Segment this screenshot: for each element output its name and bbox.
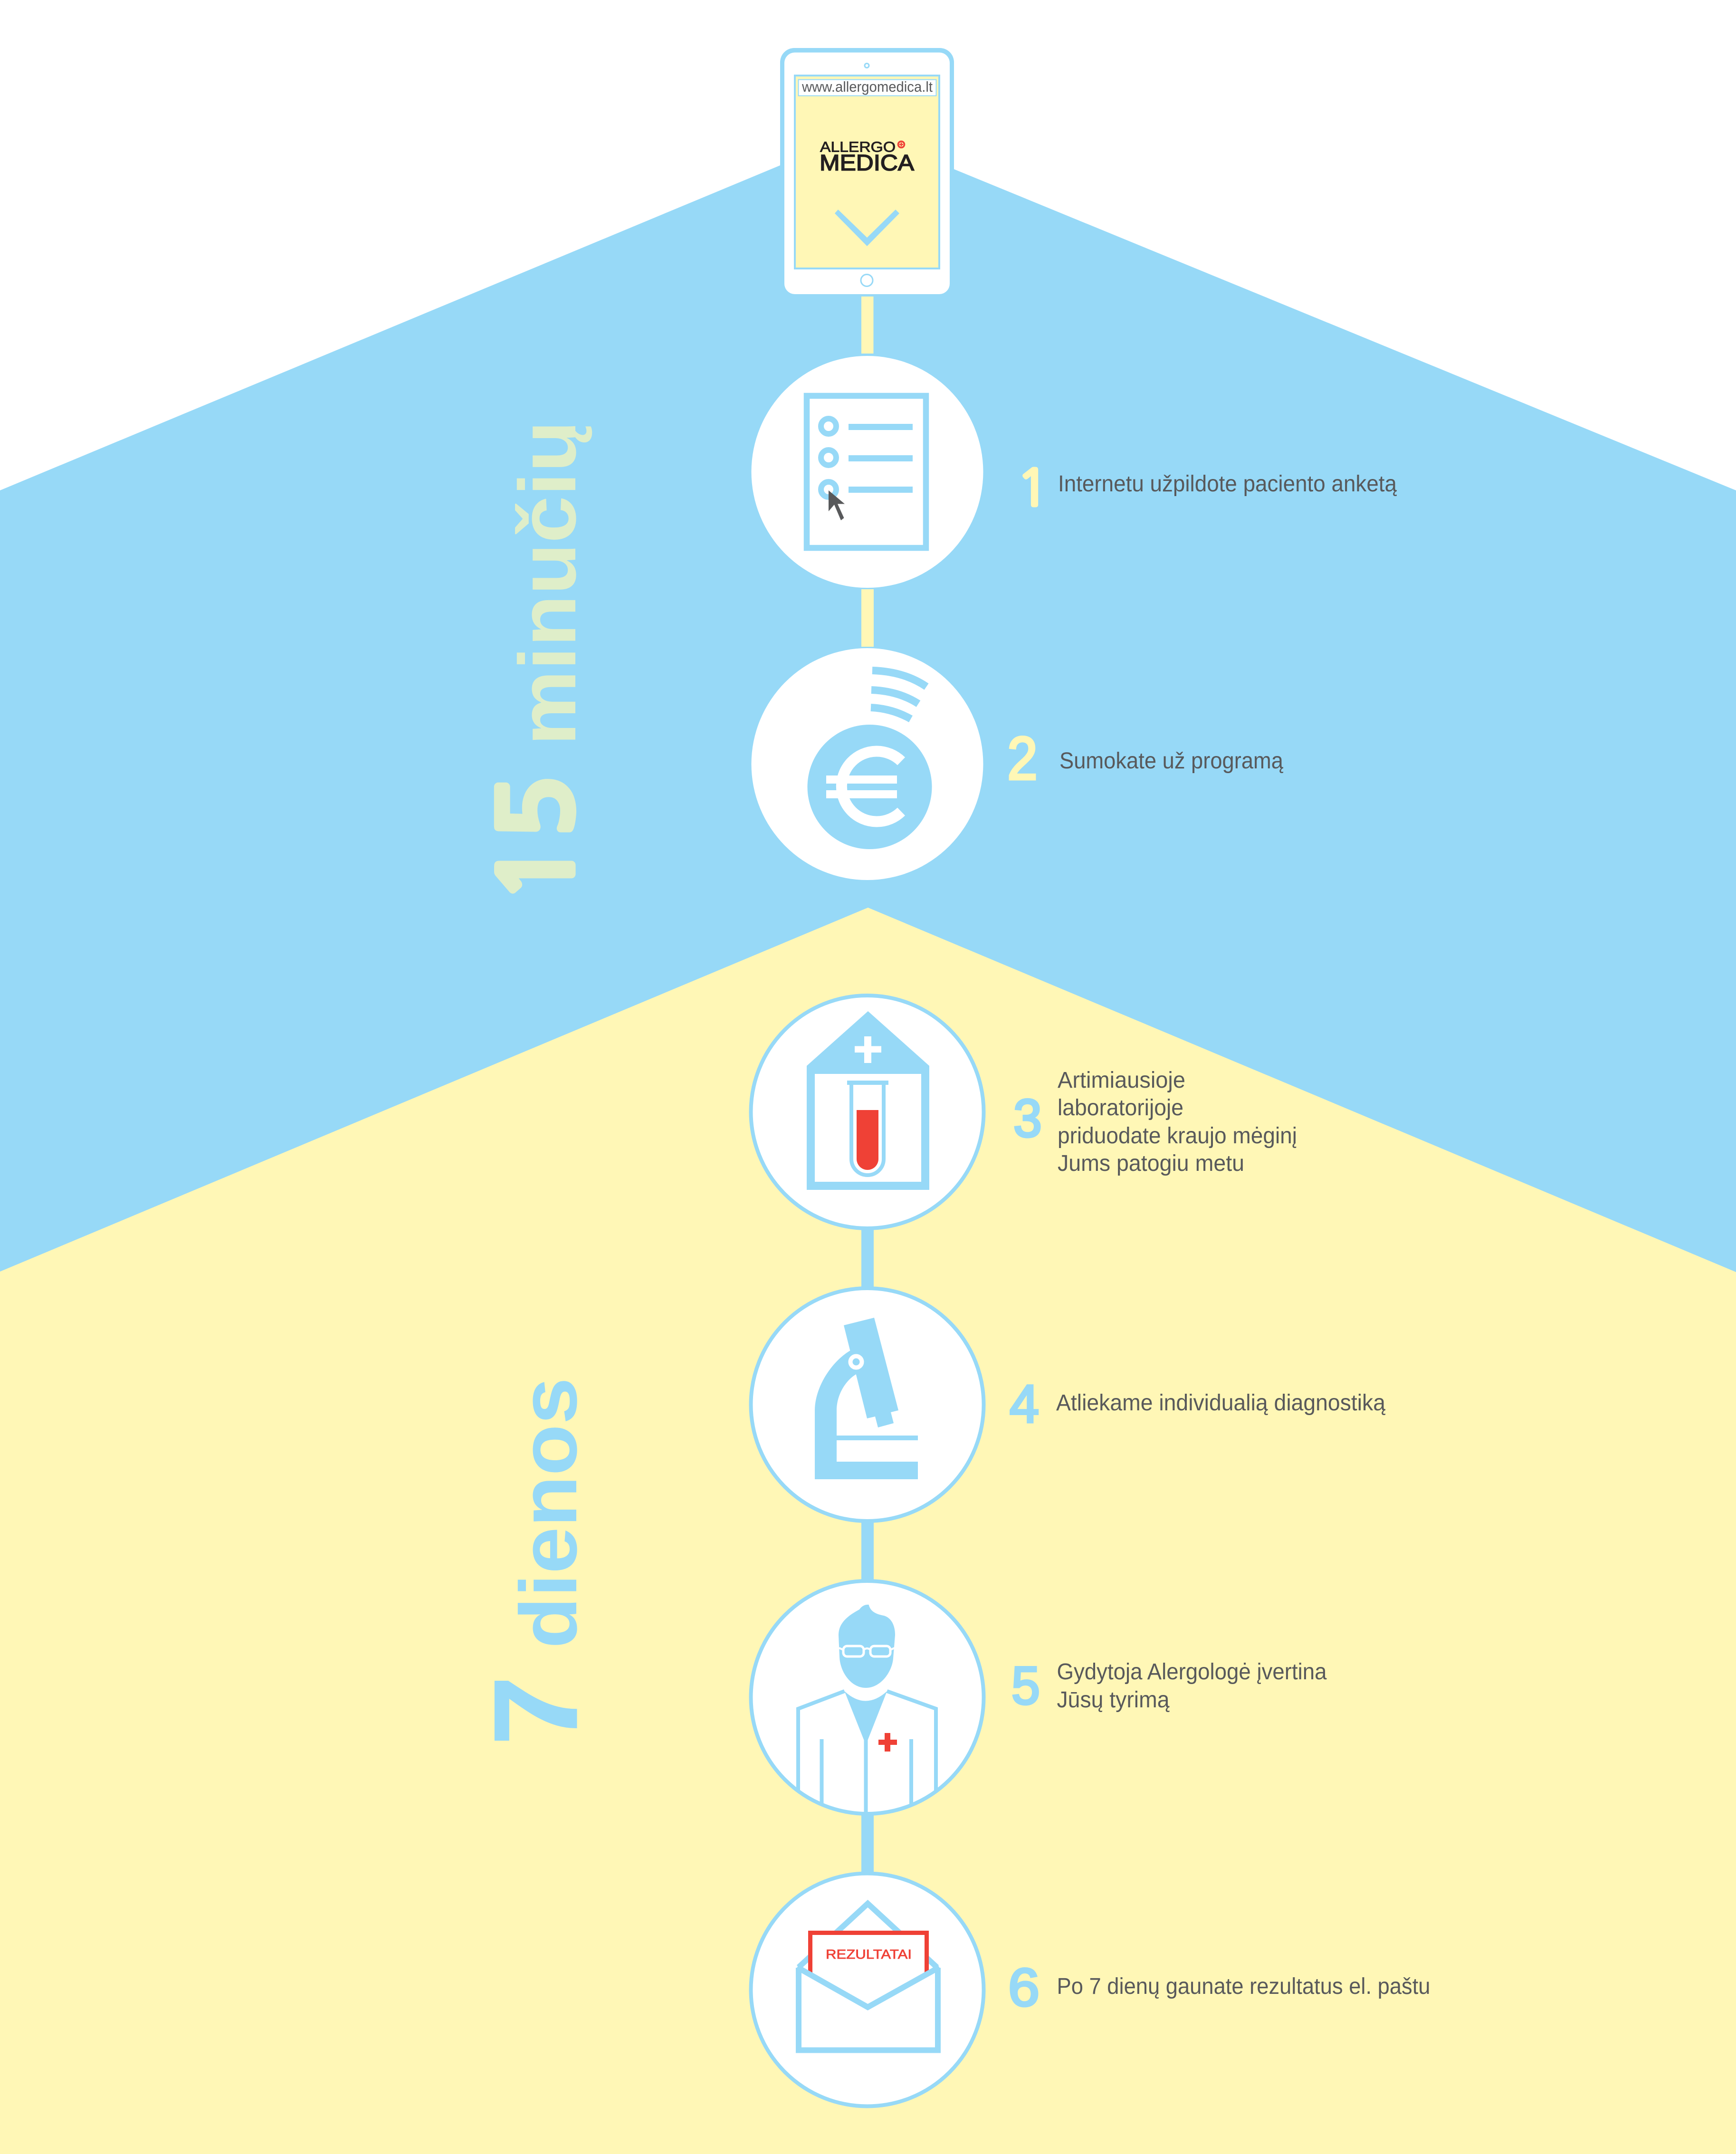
step 5: doctor icon in circle [751,1581,983,1820]
step 2: contactless euro payment icon in circle [752,648,983,880]
background: blue chevron band [0,165,1736,1283]
step 5: text: Gydytoja Alergologė įvertina [1057,1659,1327,1685]
step 4: microscope icon in circle [751,1288,983,1521]
step 2: number: 2 [1007,725,1038,793]
step 6: number: 6 [1008,1958,1040,2017]
vertical heading: 15 minučių [489,421,593,904]
vertical heading: 7 dienos: 7 [469,1676,601,1745]
step 2: text: Sumokate už programą [1059,748,1283,774]
vertical heading: 15 minučių: minučių [503,421,593,746]
step 4: text: Atliekame individualią diagnostiką [1056,1390,1385,1416]
icon: tablet with website [780,48,954,300]
vertical heading: 7 dienos: dienos [504,1378,594,1648]
step 3: text: laboratorijoje [1058,1095,1183,1120]
step 3: text [1058,1068,1297,1176]
step 3: text: priduodate kraujo mėginį [1058,1123,1297,1149]
step 1: questionnaire icon in circle [752,356,983,588]
step 5: text [1057,1659,1327,1713]
connector: tablet to step 1 [861,297,873,354]
step 3: text: Jums patogiu metu [1058,1151,1244,1176]
step 4: number: 4 [1010,1374,1039,1434]
connector: step 5 to step 6 [861,1814,874,1874]
connector: step 4 to step 5 [861,1521,874,1581]
step 6: text: Po 7 dienų gaunate rezultatus el. paštu [1057,1974,1430,1999]
step 3: number: 3 [1013,1089,1042,1148]
connector: step 3 to step 4 [861,1228,874,1288]
connector: step 1 to step 2 [861,589,874,647]
icon: tablet with website: www.allergomedica.lt [801,78,933,95]
vertical heading: 15 minučių: 15 [489,775,588,904]
step 1: number: 1 [1017,463,1049,513]
step 6: envelope with results icon in circle [751,1873,983,2106]
step 5: number: 5 [1011,1656,1040,1715]
icon: tablet with website: ALLERGO [820,139,896,155]
vertical heading: 7 dienos [469,1378,601,1745]
step 3: text: Artimiausioje [1058,1068,1185,1093]
background: yellow chevron band [0,908,1736,2154]
step 3: laboratory and test tube icon in circle [751,996,983,1228]
icon: tablet with website: MEDICA [820,150,915,175]
step 1: text: Internetu užpildote paciento anketą [1058,471,1397,497]
step 5: text: Jūsų tyrimą [1057,1687,1170,1713]
step 6: envelope with results icon in circle: REZULTATAI [826,1947,912,1962]
